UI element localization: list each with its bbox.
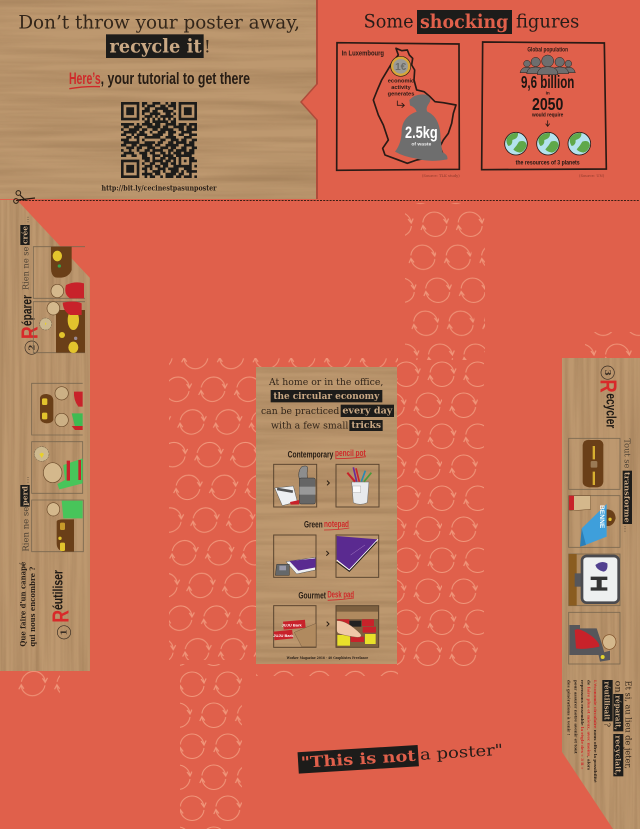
- tutorial line: [69, 69, 250, 89]
- comic panel: old sofa: [569, 438, 620, 489]
- text: tout se transforme: transforme: [622, 472, 631, 523]
- heading: gourmet desk pad: Desk pad: [327, 589, 354, 599]
- recycling pattern: upper column: [405, 203, 485, 360]
- panel: right strip: [562, 358, 640, 829]
- tutorial line: Here’s: [69, 69, 101, 88]
- intro text: can be practiced: [261, 406, 339, 417]
- arrow: [397, 101, 404, 108]
- text: rien ne se perd: [20, 476, 30, 552]
- recycling pattern: centre top: [256, 358, 398, 367]
- text: circular economy body: des générations à venir !: [567, 680, 572, 736]
- cut line: [16, 200, 640, 202]
- text: circular economy body: pour assurer notre avenir et tout: [573, 680, 578, 754]
- stat box: global population: the resources of 3 planets: [516, 160, 580, 166]
- comic panel: woman on new sofa: [569, 612, 620, 664]
- text: et si: réparait,: [613, 695, 622, 730]
- text: circular economy body: L'économie circulaire nous offre la possibilité: [593, 680, 598, 783]
- comic panel: new sofa on screen: [569, 554, 620, 606]
- illustration: tea boxes: JUJU Bark: [273, 633, 294, 638]
- heading: 1 réutiliser: 1: [60, 629, 70, 635]
- illustration: tea boxes: JUJU Bark: [282, 622, 303, 627]
- text: rien ne se crée: crée: [21, 226, 30, 244]
- illustration: can and paper: [274, 464, 317, 507]
- heading: gourmet desk pad: Gourmet: [298, 590, 326, 600]
- text: tout se transforme: ...: [623, 525, 632, 532]
- panel: shocking figures: [337, 10, 606, 178]
- text: rien ne se crée: [20, 216, 30, 290]
- text: circular economy body: repensons ensemble la règle des « 3 R »: [580, 680, 585, 770]
- text: rien ne se perd: perd: [21, 485, 30, 506]
- icon: garbage bag: [395, 94, 447, 161]
- intro text: At home or in the office,: [268, 377, 383, 388]
- intro text: every day: [342, 407, 393, 417]
- text: circular economy body: de faire plus et mieux, avec moins , alors: [587, 680, 592, 771]
- arrow: [326, 551, 329, 556]
- heading: 3 recycler: 3: [602, 370, 612, 376]
- stat box: Luxembourg: In Luxembourg: [342, 49, 384, 58]
- heading: 2 réparer: 2: [27, 345, 37, 351]
- panel: centre tricks: [256, 367, 397, 664]
- icon: crowd: [520, 55, 575, 75]
- recycling pattern: bottom centre: [180, 664, 242, 829]
- heading: recycle it: Don’t throw your poster away,: [18, 12, 300, 33]
- text: et si: Et si, au lieu de jeter,: [624, 681, 634, 769]
- text: et si: [602, 680, 634, 776]
- illustration: desk pad: [336, 606, 379, 647]
- source: (Source: UN): [579, 174, 605, 178]
- heading: some shocking figures: figures: [516, 11, 579, 32]
- stat: 9,6 billion in 2050: would require: [531, 112, 563, 118]
- heading: 3 recycler: R: [596, 379, 622, 393]
- map of Luxembourg: [373, 48, 456, 163]
- comic panel: idea: [32, 442, 83, 493]
- source: (Source: TLK study): [422, 174, 460, 178]
- heading: green notepad: notepad: [324, 519, 349, 529]
- heading: recycle it: recycle it: [109, 36, 202, 58]
- text: tout se transforme: [622, 438, 632, 532]
- arrow: [546, 120, 550, 126]
- heading: green notepad: Green: [304, 520, 323, 530]
- heading: 2 réparer: [17, 295, 43, 354]
- illustration: notepad: [336, 535, 379, 577]
- recycling pattern: centre right: [397, 358, 484, 669]
- text: rien ne se perd: ...: [21, 476, 30, 483]
- text: rien ne se crée: ...: [21, 216, 30, 223]
- heading: green notepad: [304, 519, 349, 530]
- text: question: [19, 561, 37, 647]
- intro text: the circular economy: [273, 392, 380, 402]
- heading: recycle it: [18, 12, 300, 58]
- illustration: pencil pot: [336, 464, 379, 507]
- QR code: [121, 103, 197, 177]
- stat box: global population: Global population: [527, 47, 568, 54]
- heading: gourmet desk pad: [298, 589, 354, 600]
- heading: some shocking figures: shocking: [420, 11, 508, 33]
- intro text: tricks: [351, 421, 381, 431]
- heading: contemporary pencil pot: pencil pot: [335, 448, 366, 458]
- text: et si: on: [613, 681, 623, 693]
- text: et si: recyclait,: [613, 735, 622, 775]
- stat: 2.5kg of waste: 2.5kg: [405, 123, 438, 142]
- comic panel: repaired sofa idea: [33, 301, 85, 353]
- comic panel: woman and sofa: [32, 500, 83, 552]
- stat: 9,6 billion in 2050: in: [546, 91, 550, 96]
- stat: 9,6 billion in 2050: 2050: [532, 94, 563, 114]
- credit: Worker Magazine 2016 · 40 Graphistes Freelance: [286, 656, 368, 660]
- comic panel: sofa and woman: [33, 247, 85, 298]
- slogan: this is not a poster: "This is not: [300, 747, 416, 772]
- text: question: qui nous encombre ?: [28, 567, 37, 647]
- text: rien ne se perd: Rien ne se: [21, 506, 30, 552]
- text: tout se transforme: Tout se: [623, 438, 632, 469]
- heading: 1 réutiliser: éutiliser: [49, 570, 65, 610]
- arrow: [327, 622, 329, 626]
- recycling pattern: centre left: [169, 358, 256, 660]
- icon: scissors: [14, 191, 35, 203]
- intro text: [261, 377, 394, 431]
- text: circular economy body: [567, 680, 598, 783]
- icon: three planets: [505, 132, 591, 155]
- heading: 2 réparer: R: [17, 326, 43, 339]
- label: economic activity generates: activity: [391, 85, 412, 91]
- text: et si: ?: [603, 723, 613, 728]
- text: question: Que faire d'un canapé: [19, 561, 28, 647]
- recycling pattern: strip top right: [585, 332, 640, 358]
- heading: recycle it: !: [204, 38, 211, 57]
- stat: 2.5kg of waste: [405, 123, 438, 148]
- slogan: this is not a poster: a poster": [419, 741, 504, 764]
- stat: 9,6 billion in 2050: 9,6 billion: [521, 72, 574, 92]
- comic panel: skip: [569, 496, 620, 547]
- label: economic activity generates: generates: [388, 92, 414, 98]
- panel: top left cardboard: [0, 0, 318, 199]
- heading: some shocking figures: [364, 10, 579, 34]
- heading: 1 réutiliser: [47, 570, 73, 639]
- recycling pattern: bottom left: [18, 671, 60, 697]
- text: et si: réutilisait: [603, 681, 612, 720]
- url: http://bit.ly/cecinestpasunposter: [102, 184, 217, 192]
- label: economic activity generates: economic: [388, 78, 414, 84]
- panel: left strip: [0, 200, 90, 671]
- heading: 3 recycler: ecycler: [604, 393, 620, 429]
- illustration: tea boxes: [273, 606, 316, 647]
- stat: 9,6 billion in 2050: [521, 72, 574, 118]
- comic panel: skip: BENNE: [598, 505, 605, 529]
- icon: one euro coin: 1€: [395, 62, 407, 73]
- stat box: global population: [482, 42, 606, 178]
- comic panel: two people carrying sofa: [32, 383, 83, 435]
- stat: 2.5kg of waste: of waste: [411, 142, 432, 148]
- intro text: with a few small: [271, 420, 348, 431]
- heading: 2 réparer: éparer: [19, 295, 35, 326]
- arrow: [327, 481, 329, 485]
- slogan: this is not a poster: [298, 740, 504, 774]
- tutorial line: , your tutorial to get there: [101, 69, 250, 88]
- illustration: paper and printer: [274, 535, 316, 577]
- stat box: Luxembourg: [337, 43, 460, 178]
- heading: contemporary pencil pot: Contemporary: [288, 449, 334, 459]
- recycling pattern: under centre panel: [256, 664, 398, 676]
- heading: 3 recycler: [596, 366, 622, 429]
- heading: some shocking figures: Some: [364, 11, 414, 32]
- label: economic activity generates: [388, 78, 414, 98]
- heading: 1 réutiliser: R: [47, 610, 73, 623]
- text: rien ne se crée: Rien ne se: [21, 246, 30, 290]
